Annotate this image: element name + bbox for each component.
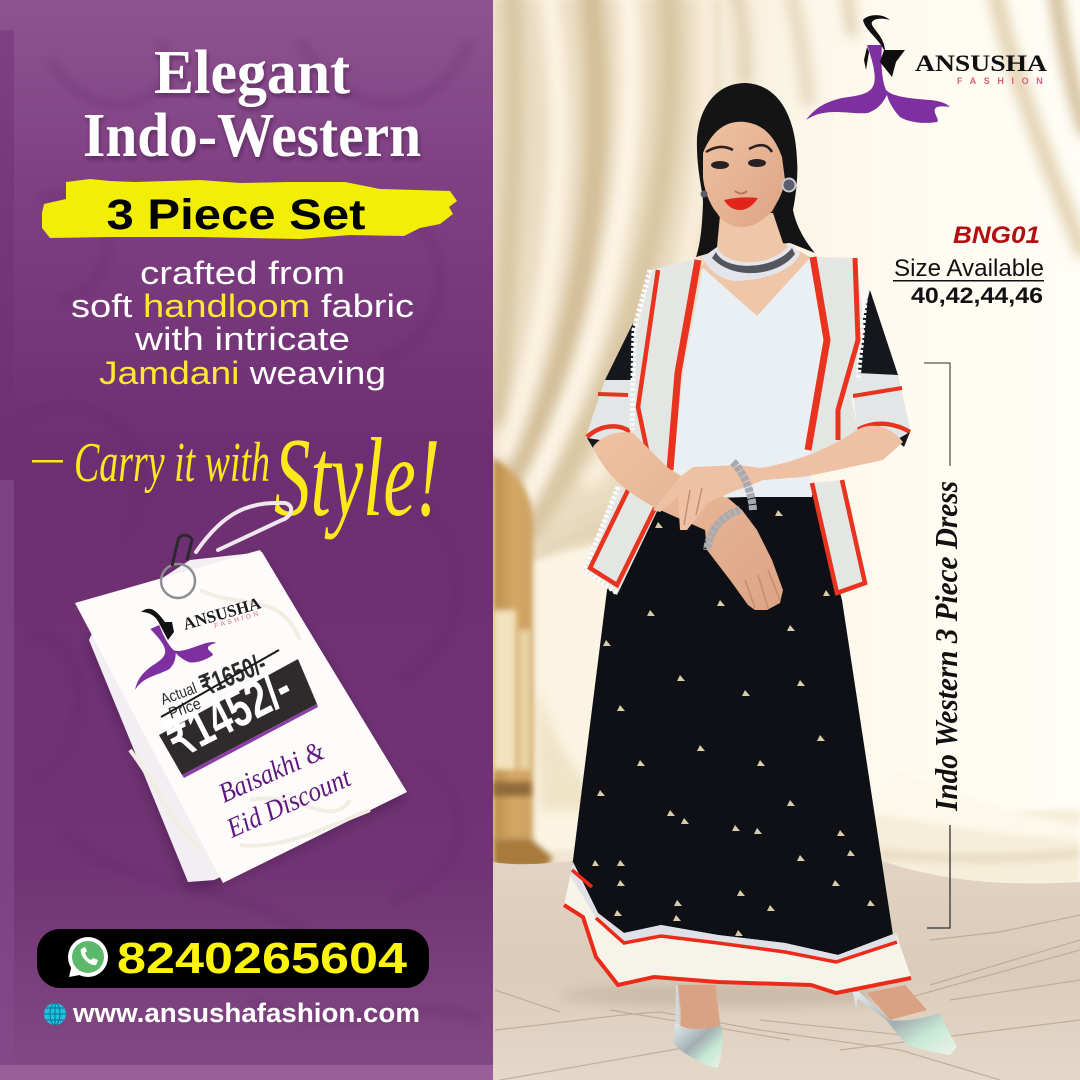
brand logo: FASHION: [957, 76, 1047, 86]
brand logo: ANSUSHA: [915, 51, 1047, 77]
discount text: Eid Discount: [221, 762, 356, 845]
icon: whatsapp: [68, 937, 108, 977]
neck and chest: [700, 213, 812, 316]
brand logo: [806, 15, 1047, 123]
slogan: Carry it with Style: Style!: [274, 416, 440, 540]
tag string: [196, 503, 291, 552]
vertical caption with bracket lines: Indo Western 3 Piece Dress: [928, 481, 964, 812]
banner: 3 Piece Set: 3 Piece Set: [106, 191, 366, 239]
draped curtain folds: [493, 0, 1080, 562]
slogan: Carry it with Style: [32, 416, 440, 540]
description text: crafted from: [140, 255, 345, 291]
jacket right panel: [808, 257, 866, 595]
face: [700, 122, 796, 227]
product code and sizes: [893, 222, 1044, 308]
product code and sizes: BNG01: [953, 222, 1040, 249]
wooden floor: [493, 860, 1080, 1080]
phone pill: [37, 929, 429, 988]
vertical caption with bracket lines: [924, 363, 964, 928]
white top: [672, 258, 822, 497]
front card: [75, 550, 407, 883]
photo background: curtains, lamp and floor: [493, 0, 1080, 1080]
product code and sizes: Size Available: [894, 255, 1044, 282]
logo figure hair: [863, 15, 905, 77]
back cards: [89, 552, 405, 882]
price band: ₹1452/-: [157, 658, 301, 770]
discount text: Baisakhi &: [214, 735, 329, 809]
left shoe: [673, 985, 722, 1068]
golden lamp: [493, 458, 553, 868]
heading: Elegant Indo-Western: Elegant: [154, 39, 350, 107]
slogan: Carry it with Style: Carry it with: [74, 432, 270, 494]
draped cloth: [866, 770, 1080, 885]
price band: [157, 658, 318, 778]
left arm and lower hand: [593, 432, 783, 610]
left purple panel: [0, 0, 493, 1080]
heading: Elegant Indo-Western: [83, 39, 421, 170]
heading: Elegant Indo-Western: Indo-Western: [83, 102, 421, 170]
banner: 3 Piece Set: [42, 179, 457, 239]
right sleeve: [852, 288, 910, 447]
actual price: ₹1650/-: [196, 647, 270, 702]
model figure: [564, 83, 957, 1068]
skirt triangles: [592, 510, 875, 936]
jacket left panel: [583, 258, 700, 595]
bracelets: [707, 462, 753, 550]
icon: globe: [44, 1003, 66, 1025]
description text: with intricate: [134, 321, 350, 357]
tag logo: ANSUSHA: [181, 593, 264, 634]
description text: [71, 255, 414, 391]
actual price: [159, 647, 279, 723]
tag logo: [114, 593, 264, 692]
description text: Jamdani weaving: [99, 355, 386, 391]
actual price: Actual: [159, 680, 199, 709]
safety pin and ring: [161, 535, 195, 598]
left sleeve: [587, 323, 650, 448]
black skirt: [570, 495, 893, 978]
price tag: [75, 503, 407, 883]
lower cream drape: [526, 540, 690, 850]
description text: soft handloom fabric: [71, 288, 414, 324]
phone pill: 8240265604: [117, 934, 408, 983]
actual price: Price: [167, 695, 203, 723]
right arm and upper hand: [653, 426, 903, 530]
logo dress: [806, 45, 950, 123]
necklace: [703, 243, 800, 281]
tag logo: FASHION: [214, 610, 262, 630]
product code and sizes: 40,42,44,46: [911, 283, 1043, 308]
hair: [696, 83, 815, 257]
skirt hem: [564, 862, 911, 993]
right shoe: [853, 985, 957, 1055]
website: www.ansushafashion.com: [72, 998, 420, 1028]
